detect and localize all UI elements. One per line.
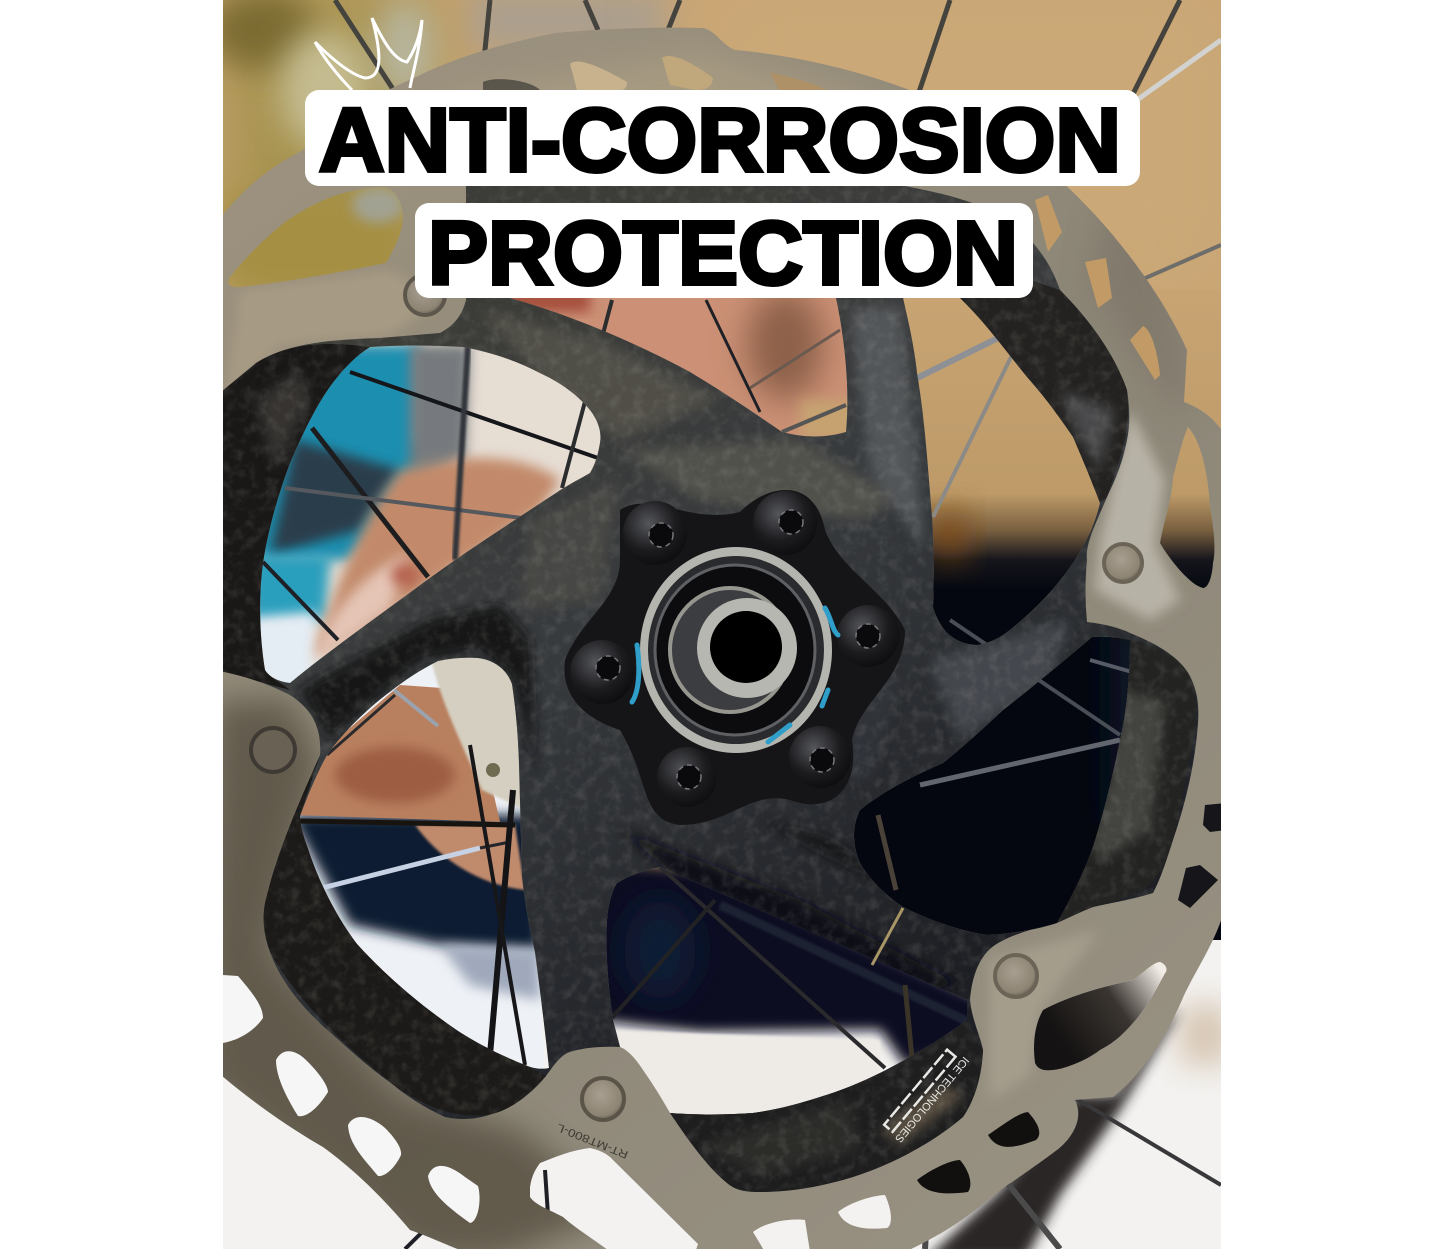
rotor: branding mark: ICE TECHNOLOGIES: [892, 1054, 971, 1145]
rivet: [1104, 544, 1142, 582]
bolt: [789, 726, 851, 788]
spokes: [263, 0, 1221, 1249]
bolt: [753, 491, 817, 555]
bolt: [657, 747, 717, 807]
blue threadlocker: [632, 608, 838, 742]
rotor: worn highlights on carrier: [480, 305, 1070, 780]
rotor: dust patches on band: [255, 370, 1165, 1175]
bolt: [837, 605, 899, 667]
rotor: carrier detail: [215, 270, 1196, 1192]
rotor: deep folds in carrier: [300, 605, 960, 990]
rotor: dark band tint: [215, 270, 1196, 1192]
background: lower-left window: [300, 658, 542, 1008]
background: tan fading to navy on right: [926, 439, 1214, 588]
bolt: [623, 501, 687, 565]
rotor: dark carrier and band: [215, 186, 1198, 1192]
hub recess: [564, 490, 905, 825]
rotor: grit texture: [215, 186, 1198, 1192]
bolt drives: [596, 510, 880, 789]
infographic: photo of a disc rotor with title: [223, 0, 1221, 1249]
background: upper-left window: [260, 346, 600, 683]
title: line one label: ANTI-CORROSION: [319, 91, 1121, 191]
rivet: [995, 955, 1037, 997]
background: lower window navy to white: [606, 867, 967, 1066]
rotor: steel brake track: [215, 28, 1226, 1249]
bearing and axle: [640, 547, 832, 753]
rotor: vent holes: [223, 56, 1226, 1249]
hub bolts: [570, 491, 899, 807]
bolt: [570, 640, 634, 704]
rivet: [251, 728, 295, 772]
rotor: steel track with carrier and windows: [200, 28, 1226, 1249]
rotor: scratch on arm: [872, 908, 903, 965]
rivet: [405, 275, 445, 315]
background: pink sleeve behind top window: [552, 298, 847, 436]
logo: crown outline: [315, 18, 422, 90]
rotor: part number: RT-MT800-L: [555, 1121, 630, 1160]
title: line two label: PROTECTION: [428, 204, 1018, 304]
rotor: fading hole at lower right: [1034, 962, 1166, 1070]
rotor: tonal shading on steel: [200, 50, 1190, 1249]
rivet: [582, 1078, 624, 1120]
background: blurred workshop scene: [207, 0, 1240, 1249]
background: white floor: [223, 940, 1221, 1249]
rotor: rivets: [251, 275, 1142, 1120]
